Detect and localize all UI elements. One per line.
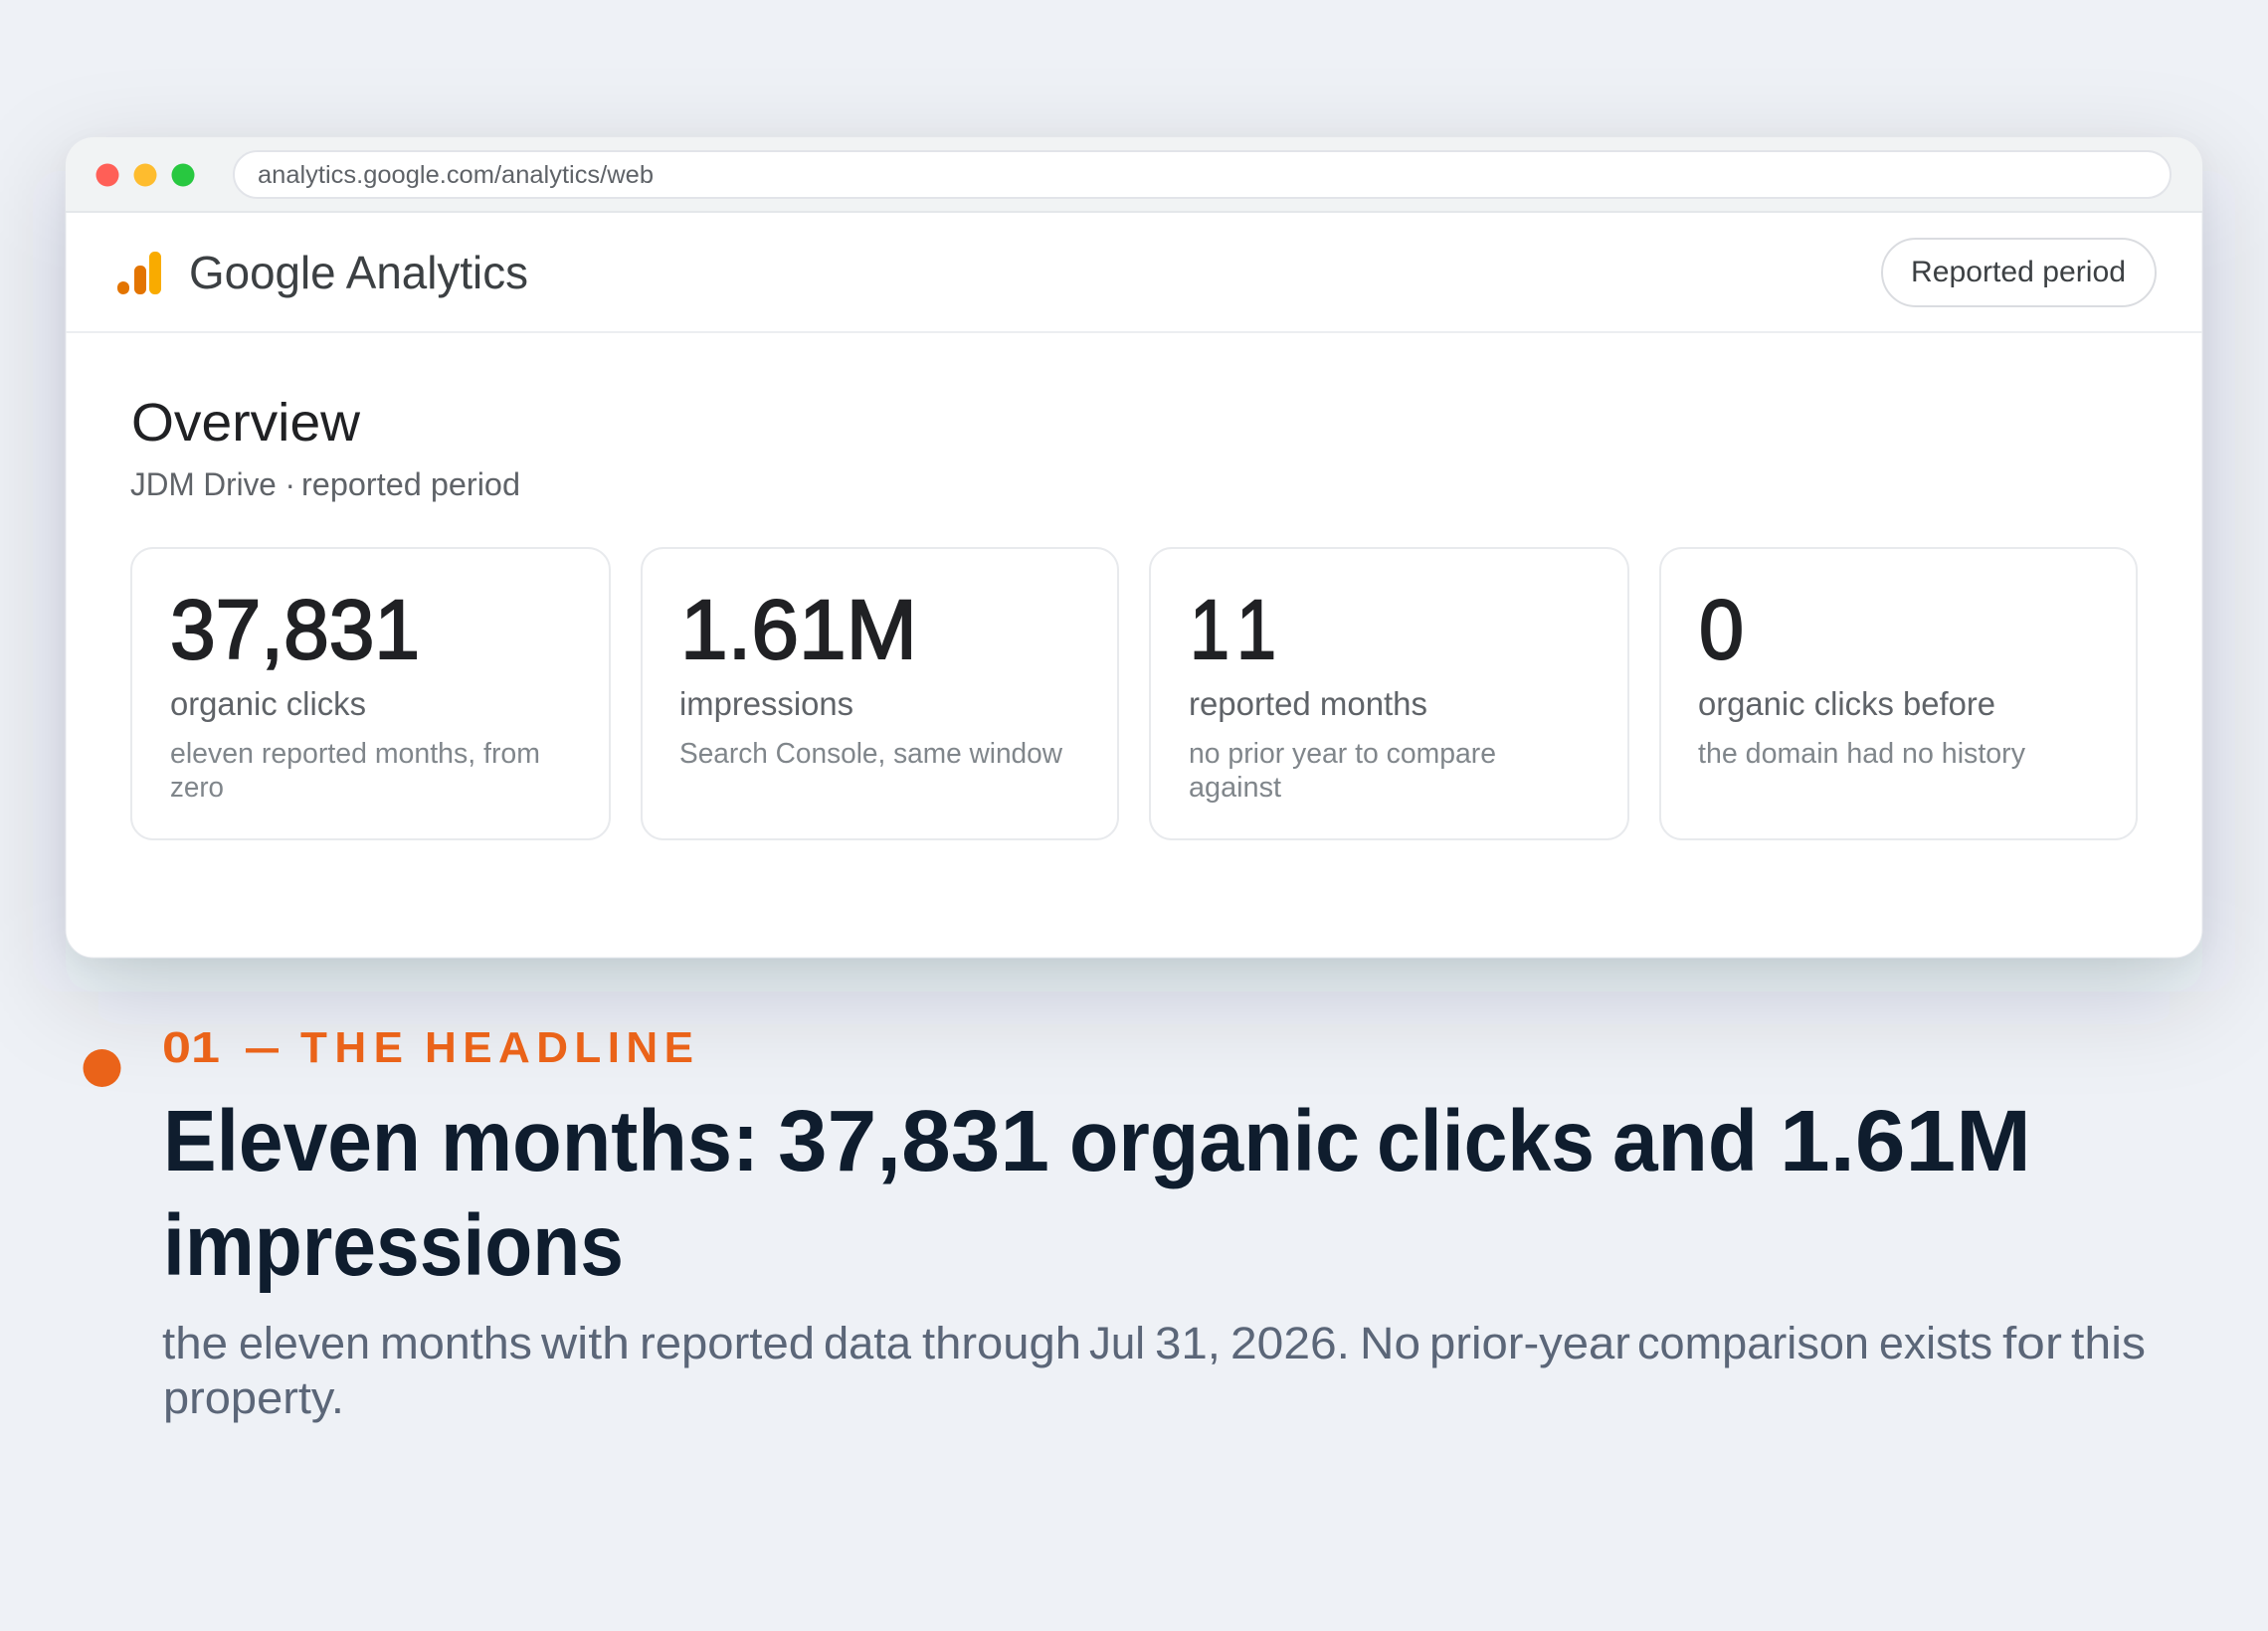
section kicker: — <box>246 1023 279 1072</box>
supporting text: for <box>2002 1318 2062 1368</box>
main headline: impressions <box>163 1197 624 1294</box>
main headline: clicks <box>1377 1093 1595 1189</box>
stat card: impressions: impressions <box>679 685 853 722</box>
main headline <box>163 1093 2031 1294</box>
supporting text: exists <box>1879 1318 1992 1368</box>
stat card: reported months: reported months <box>1189 685 1427 722</box>
supporting text: property. <box>163 1372 344 1423</box>
supporting text: Jul <box>1089 1318 1145 1368</box>
reported period pill <box>1882 239 2156 306</box>
app header <box>66 239 2202 333</box>
reported period pill: Reported period <box>1911 256 2126 288</box>
stat card: organic clicks: organic clicks <box>170 685 366 722</box>
stat card: organic clicks before: 0 <box>1699 583 1744 676</box>
stat card: organic clicks before: the domain had no history <box>1698 738 2025 770</box>
section kicker: HEADLINE <box>425 1023 693 1072</box>
supporting text: 2026. <box>1230 1318 1350 1368</box>
supporting text: months <box>380 1318 532 1368</box>
browser title bar <box>66 137 2202 213</box>
section kicker: 01 <box>162 1023 220 1072</box>
address bar: analytics.google.com/analytics/web <box>258 161 654 189</box>
stat card: organic clicks before: organic clicks before <box>1698 685 1995 722</box>
section kicker: THE <box>300 1023 403 1072</box>
stat card: organic clicks: 37,831 <box>170 583 420 676</box>
main headline: 1.61M <box>1780 1093 2031 1189</box>
supporting text <box>162 1318 2146 1423</box>
supporting text: this <box>2071 1318 2146 1368</box>
stat card: organic clicks before <box>1660 548 2137 839</box>
supporting text: the <box>162 1318 228 1368</box>
supporting text: prior-year <box>1429 1318 1630 1368</box>
stat card: impressions: 1.61M <box>680 583 917 676</box>
supporting text: reported <box>640 1318 815 1368</box>
stat card: organic clicks: eleven reported months, from <box>170 738 540 770</box>
product name: Google Analytics <box>189 247 528 298</box>
stat card: reported months: 1 <box>1236 583 1276 676</box>
supporting text: through <box>922 1318 1081 1368</box>
window control dots <box>95 163 195 187</box>
main headline: organic <box>1069 1093 1360 1189</box>
supporting text: with <box>540 1318 630 1368</box>
address bar <box>234 151 2171 198</box>
main headline: and <box>1612 1093 1758 1189</box>
main headline: Eleven <box>163 1093 421 1189</box>
browser window <box>66 137 2202 992</box>
section kicker <box>162 1023 693 1072</box>
stat card: organic clicks <box>131 548 610 839</box>
stat card: reported months <box>1150 548 1628 839</box>
supporting text: data <box>824 1318 912 1368</box>
stat card: organic clicks: zero <box>170 772 224 804</box>
stat card: impressions <box>642 548 1118 839</box>
overview heading: Overview <box>131 393 361 453</box>
main headline: 37,831 <box>778 1093 1049 1189</box>
stat card: reported months: against <box>1189 772 1281 804</box>
supporting text: eleven <box>239 1318 370 1368</box>
supporting text: comparison <box>1637 1318 1869 1368</box>
stat card: reported months: no prior year to compare <box>1189 738 1496 770</box>
icon: Google Analytics logo <box>117 252 161 294</box>
overview subtitle <box>130 466 520 502</box>
section marker dot <box>84 1049 121 1087</box>
overview subtitle: JDM Drive · <box>130 466 295 502</box>
main headline: months: <box>441 1093 759 1189</box>
supporting text: No <box>1360 1318 1420 1368</box>
overview subtitle: reported period <box>301 466 520 502</box>
stat card: impressions: Search Console, same window <box>679 738 1063 770</box>
stat card: reported months: 1 <box>1190 583 1229 676</box>
supporting text: 31, <box>1155 1318 1221 1368</box>
